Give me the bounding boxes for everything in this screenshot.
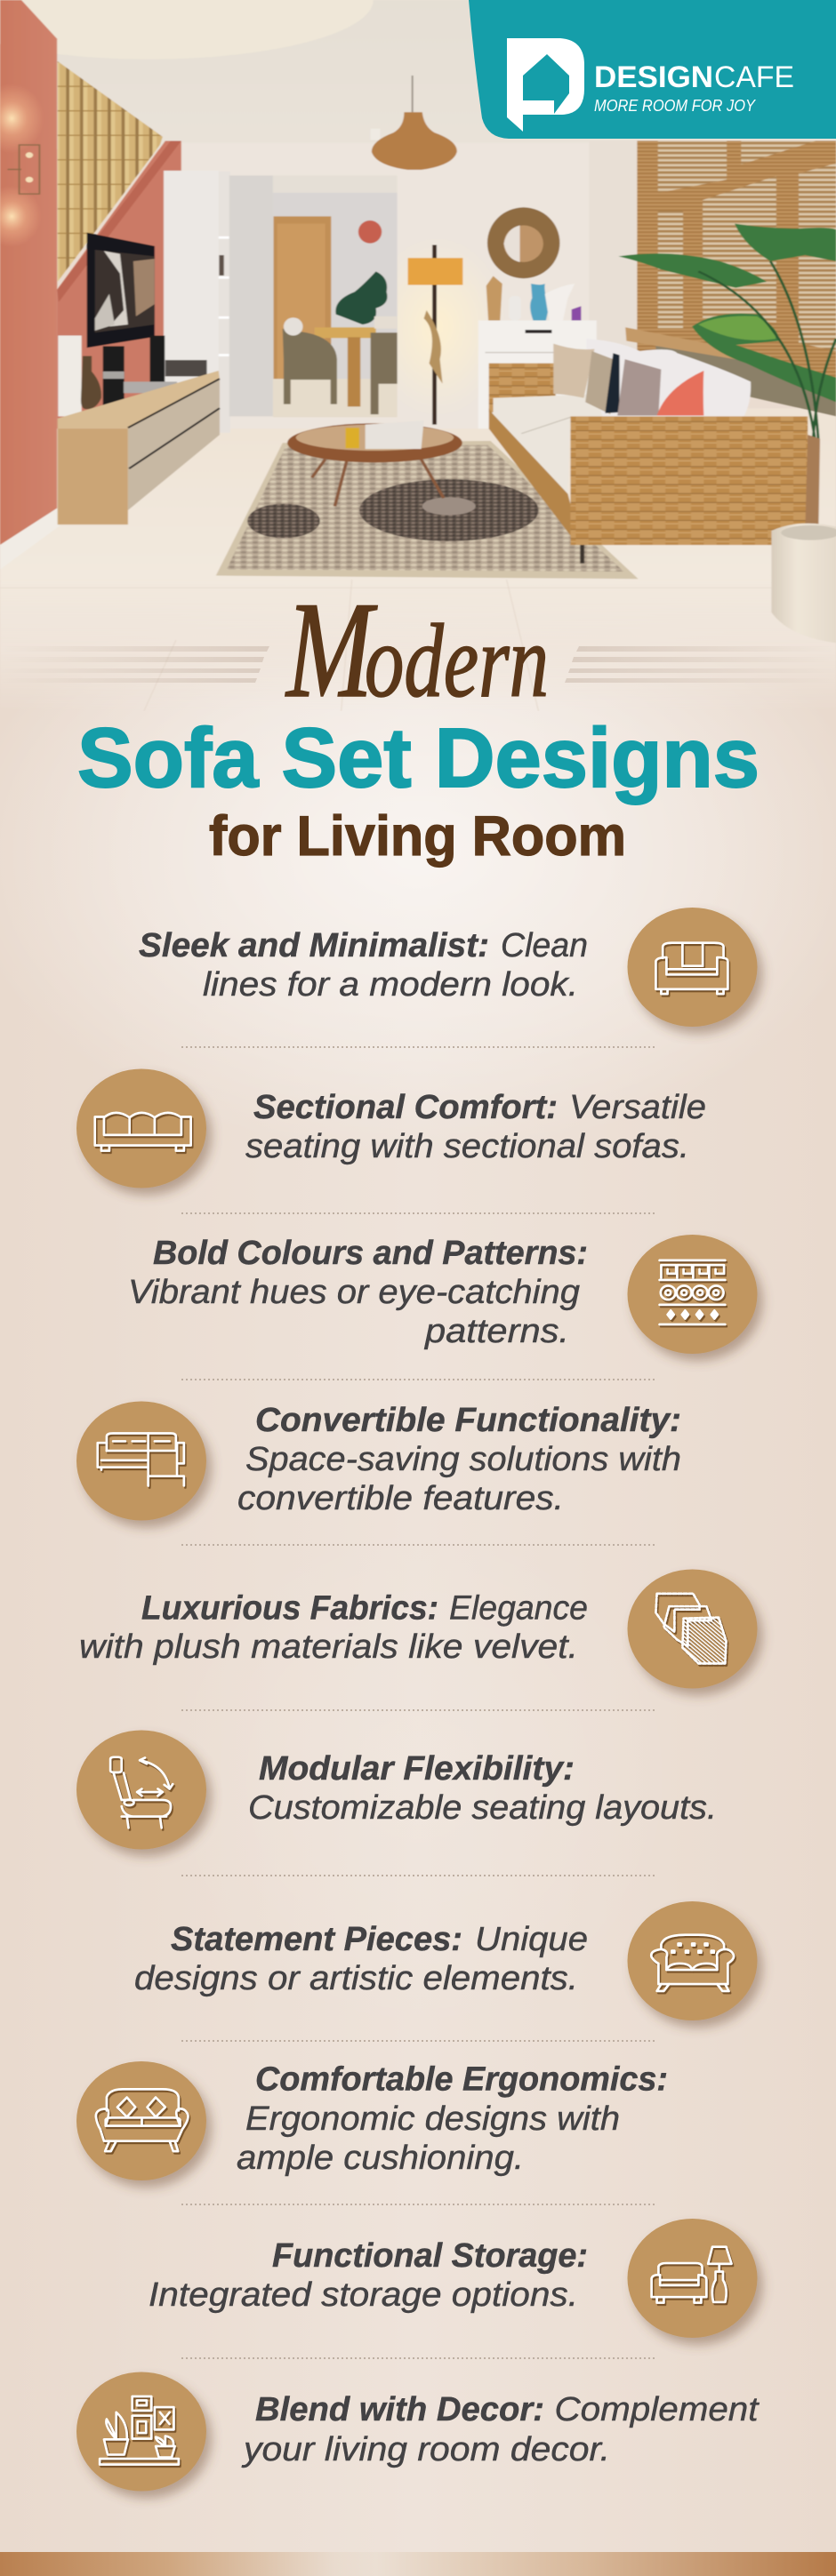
logo mark bbox=[507, 38, 584, 132]
coffee table bbox=[312, 460, 444, 506]
item 7: statement pieces: designs or artistic elements. bbox=[134, 1960, 578, 1997]
item 9: functional storage: Functional Storage: bbox=[272, 2237, 588, 2275]
photo: modern living room interior bbox=[0, 0, 836, 711]
icon: sofa with cushions bbox=[96, 2089, 188, 2151]
icon: adjustable chair with arrows bbox=[110, 1757, 173, 1828]
item 8: comfortable ergonomics bbox=[76, 2060, 668, 2180]
bottom gradient band bbox=[0, 2552, 836, 2576]
item 10: blend with decor: your living room decor. bbox=[241, 2431, 610, 2468]
logo wordmark: DESIGN bbox=[594, 60, 713, 94]
white chest bbox=[478, 321, 597, 428]
item 1: sleek and minimalist: Sleek and Minimalist: bbox=[139, 927, 489, 964]
title: Sofa Set Designs bbox=[77, 711, 760, 805]
item 8: comfortable ergonomics: ample cushioning. bbox=[237, 2140, 524, 2177]
item 5: luxurious fabrics: Luxurious Fabrics: bbox=[141, 1589, 438, 1627]
pendant lamp bbox=[412, 76, 414, 112]
logo wordmark: MORE ROOM FOR JOY bbox=[594, 97, 757, 115]
title: Modern bbox=[285, 573, 549, 726]
vases and books bbox=[58, 335, 82, 416]
item 3: bold colours and patterns: Bold Colours and Patterns: bbox=[153, 1235, 588, 1272]
item 7: statement pieces: Statement Pieces: bbox=[171, 1921, 462, 1958]
item 4: convertible functionality: convertible features. bbox=[237, 1480, 564, 1517]
bamboo bbox=[58, 61, 163, 282]
logo wordmark: CAFE bbox=[714, 60, 794, 94]
item 5: luxurious fabrics bbox=[79, 1570, 758, 1689]
item 6: modular flexibility: Customizable seating layouts. bbox=[248, 1789, 717, 1827]
item 7: statement pieces: Unique bbox=[475, 1921, 588, 1958]
item 1: sleek and minimalist bbox=[139, 908, 758, 1027]
item 4: convertible functionality bbox=[76, 1401, 681, 1520]
icon: three-seat sofa bbox=[95, 1113, 191, 1151]
item 3: bold colours and patterns: Vibrant hues or eye-catching bbox=[128, 1274, 580, 1311]
icon: armchair bbox=[655, 943, 727, 994]
pillows bbox=[586, 339, 751, 416]
logo banner bbox=[469, 0, 836, 139]
item 1: sleek and minimalist: lines for a modern look. bbox=[203, 966, 578, 1004]
next room bbox=[273, 175, 398, 194]
window blinds bbox=[637, 140, 836, 394]
wall sconce bbox=[7, 145, 39, 194]
icon: tufted sofa bbox=[651, 1935, 734, 1991]
pot bbox=[771, 524, 836, 643]
item 3: bold colours and patterns bbox=[128, 1235, 758, 1354]
left wall bbox=[0, 0, 57, 545]
TV bbox=[87, 233, 155, 348]
item 2: sectional comfort: seating with sectional sofas. bbox=[245, 1128, 689, 1165]
item 10: blend with decor bbox=[76, 2372, 760, 2491]
icon: ornamental patterns bbox=[660, 1260, 725, 1324]
sofa front bbox=[489, 408, 581, 545]
item 6: modular flexibility: Modular Flexibility: bbox=[259, 1750, 575, 1788]
item 8: comfortable ergonomics: Comfortable Ergonomics: bbox=[255, 2060, 668, 2098]
ceiling bbox=[0, 0, 836, 149]
item 4: convertible functionality: Convertible Functionality: bbox=[255, 1402, 681, 1439]
white cabinet bbox=[164, 171, 220, 432]
item 9: functional storage bbox=[149, 2219, 758, 2338]
item 10: blend with decor: Blend with Decor: bbox=[255, 2391, 544, 2428]
mirror bbox=[487, 207, 559, 278]
item 4: convertible functionality: Space-saving solutions with bbox=[245, 1441, 681, 1478]
icon: fabric swatches bbox=[655, 1594, 727, 1663]
floor bbox=[0, 408, 836, 711]
item 5: luxurious fabrics: with plush materials like velvet. bbox=[79, 1628, 578, 1666]
TV unit bbox=[58, 371, 220, 428]
item 7: statement pieces bbox=[134, 1901, 758, 2020]
item 2: sectional comfort bbox=[76, 1068, 706, 1188]
floor lamp bbox=[432, 245, 437, 425]
icon: armchair and floor lamp bbox=[652, 2247, 732, 2303]
decor on cabinet bbox=[486, 276, 502, 321]
item 2: sectional comfort: Sectional Comfort: bbox=[253, 1089, 558, 1126]
logo wordmark bbox=[594, 60, 794, 115]
item 3: bold colours and patterns: patterns. bbox=[424, 1313, 569, 1350]
title decorative stripes bbox=[0, 646, 836, 683]
back wall bbox=[181, 143, 591, 428]
item 5: luxurious fabrics: Elegance bbox=[449, 1589, 588, 1627]
plant bbox=[618, 224, 836, 402]
title: for Living Room bbox=[209, 805, 626, 868]
item 1: sleek and minimalist: Clean bbox=[501, 927, 588, 964]
item 10: blend with decor: Complement bbox=[555, 2391, 760, 2428]
item 2: sectional comfort: Versatile bbox=[569, 1089, 706, 1126]
title bbox=[77, 573, 760, 868]
item 9: functional storage: Integrated storage options. bbox=[149, 2276, 578, 2314]
sofa bbox=[489, 364, 556, 412]
rug bbox=[216, 441, 639, 579]
icon: convertible sectional sofa bbox=[98, 1433, 184, 1485]
icon: plants and picture frames bbox=[100, 2396, 179, 2465]
stair coral wall bbox=[57, 140, 181, 428]
item 6: modular flexibility bbox=[76, 1730, 717, 1849]
item 8: comfortable ergonomics: Ergonomic designs with bbox=[245, 2100, 620, 2138]
